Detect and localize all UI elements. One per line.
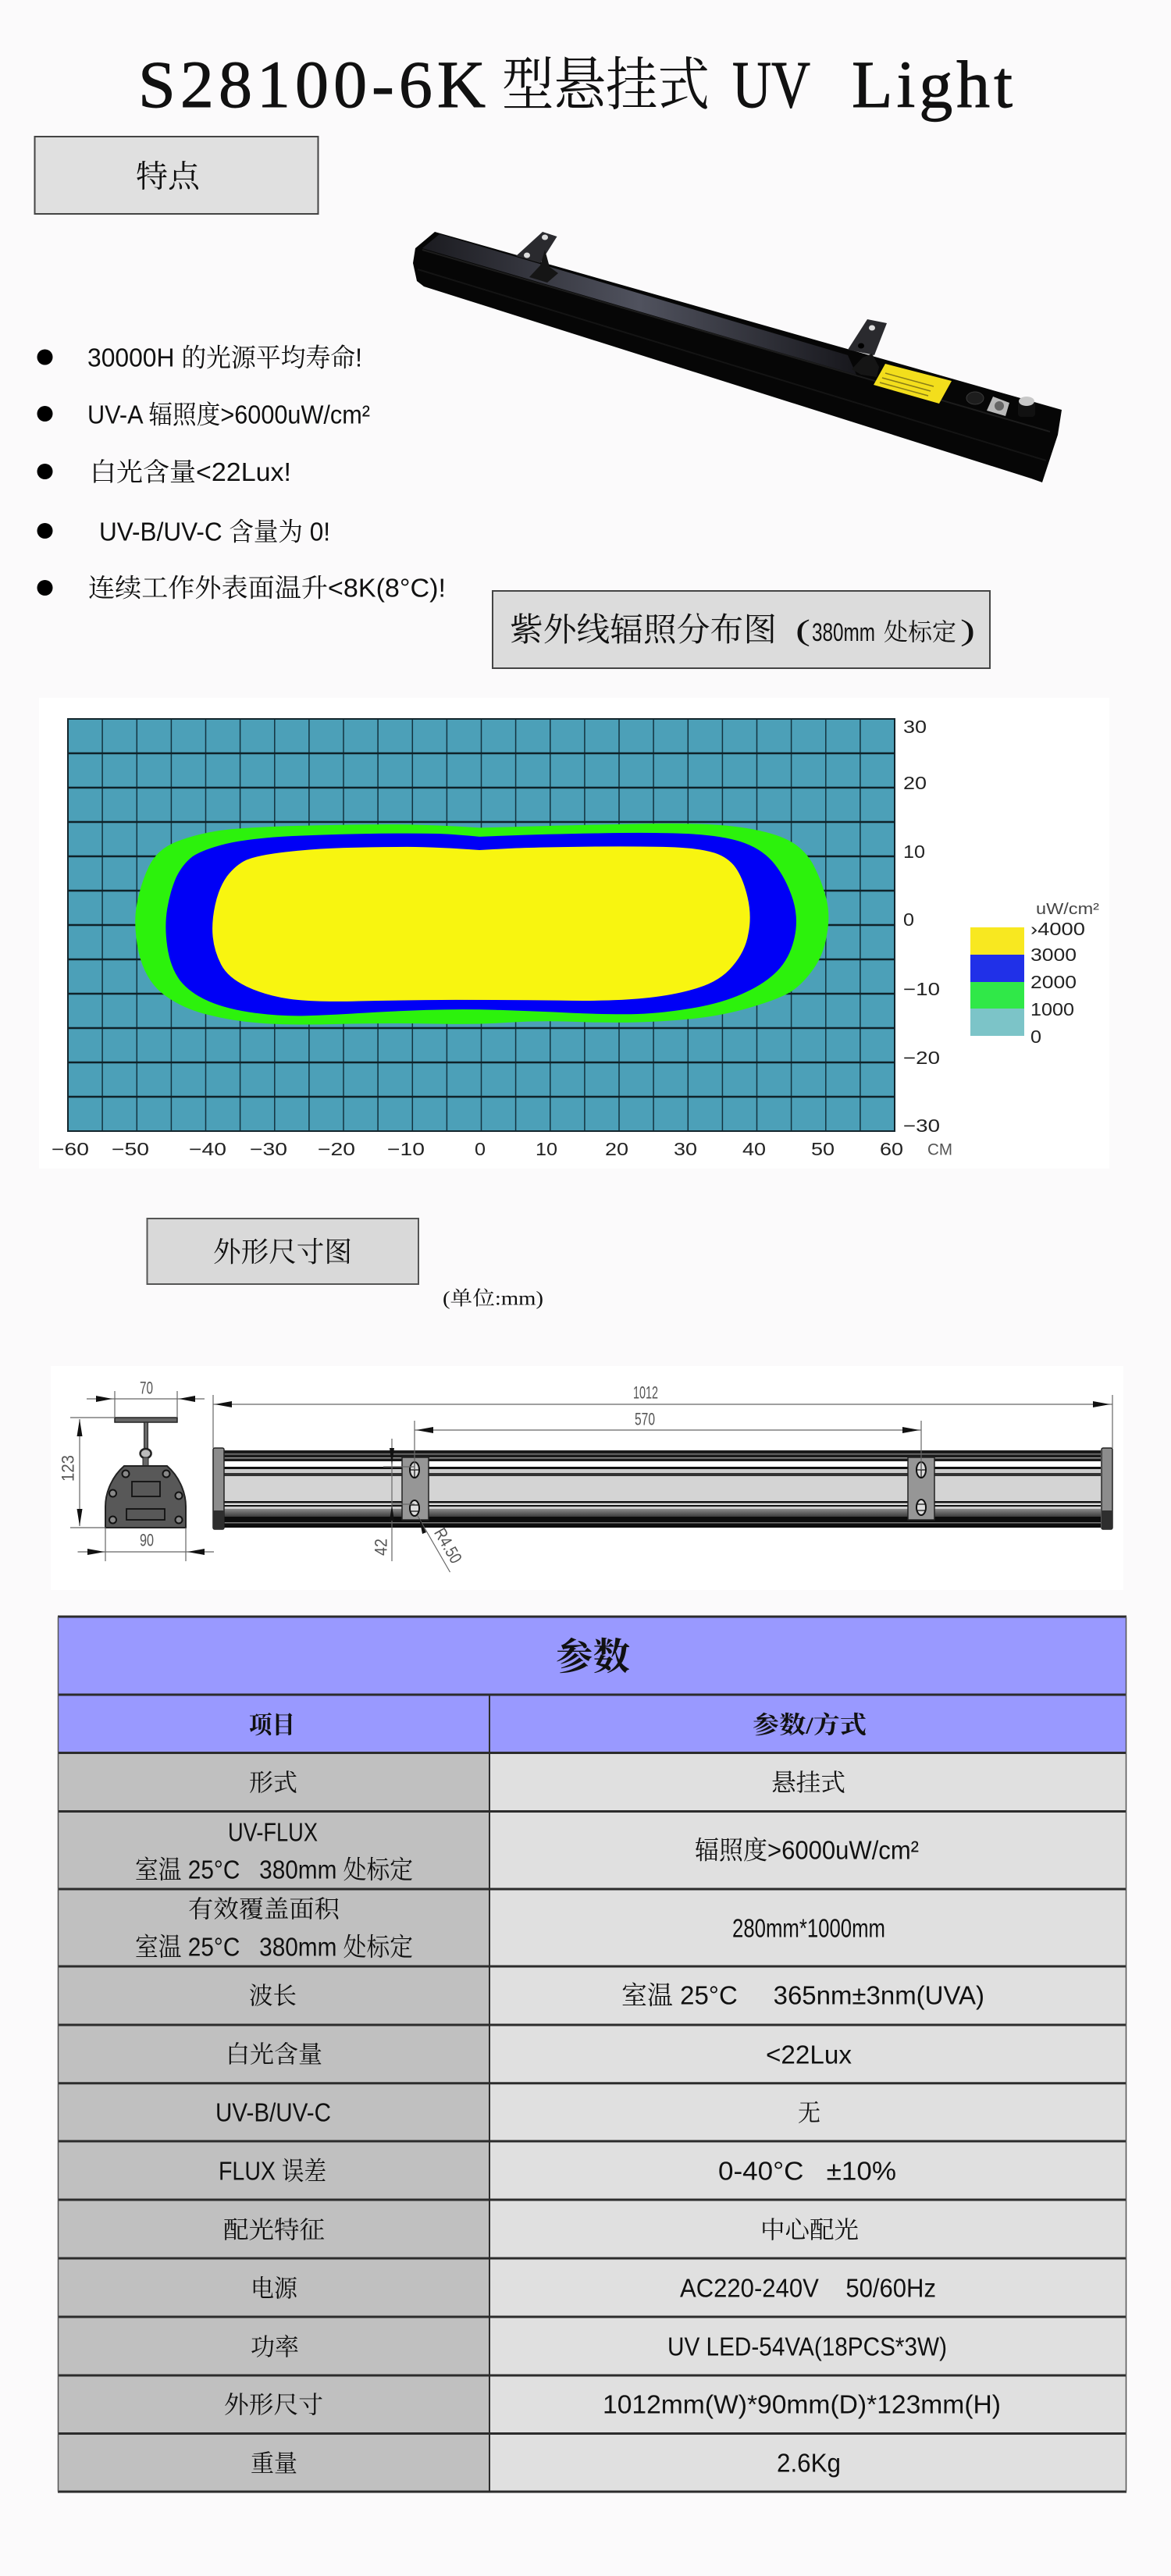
row: weight: [251, 2448, 841, 2478]
legend: 0: [1030, 1026, 1041, 1047]
row: form: 悬挂式: [771, 1769, 845, 1797]
table title: 参数: [556, 1636, 630, 1678]
unit note: (单位:mm): [443, 1288, 543, 1310]
x axis labels: 20: [605, 1139, 628, 1159]
legend: ›4000: [1030, 919, 1085, 939]
feature list: 白光含量<22Lux!: [90, 457, 291, 486]
row: effective area: [135, 1895, 885, 1961]
legend: uW/cm²: [1036, 901, 1099, 918]
x axis labels: [52, 1139, 952, 1159]
front view dimensions: [213, 1383, 1112, 1572]
row: flux error: 0-40°C ±10%: [718, 2156, 896, 2186]
heading: UV irradiance distribution: ): [960, 614, 975, 647]
row: UV-FLUX: 辐照度>6000uW/cm²: [695, 1836, 919, 1864]
column headers: 参数/方式: [753, 1711, 867, 1739]
row: UV-B/UV-C: 无: [798, 2100, 820, 2126]
front view dimensions: 1012: [633, 1383, 658, 1402]
row: UV-B/UV-C: UV-B/UV-C: [215, 2098, 331, 2126]
row: white light: [226, 2041, 852, 2069]
right bracket: [848, 319, 887, 377]
end view drawing: [105, 1418, 186, 1528]
irradiance contours: [135, 824, 828, 1024]
row: flux error: FLUX 误差: [219, 2156, 326, 2186]
end view dimensions: 70: [140, 1379, 153, 1397]
heading: UV irradiance distribution: [493, 591, 990, 668]
y axis labels: −10: [903, 979, 940, 999]
row: light distribution: 中心配光: [760, 2217, 859, 2243]
x axis labels: −40: [189, 1139, 226, 1159]
row: white light: 白光含量: [226, 2041, 322, 2069]
y axis labels: [903, 717, 940, 1136]
row: form: 形式: [249, 1769, 297, 1797]
y axis labels: 30: [903, 717, 927, 737]
heat map grid: [68, 719, 895, 1131]
row: effective area: 280mm*1000mm: [732, 1914, 885, 1942]
y axis labels: −20: [903, 1048, 940, 1068]
row: wavelength: 波长: [249, 1983, 297, 2009]
parameter table: [58, 1617, 1127, 2492]
feature list: UV-B/UV-C 含量为 0!: [99, 517, 330, 546]
front view drawing: [213, 1448, 1112, 1529]
end view dimensions: 123: [58, 1455, 78, 1482]
feature list: 30000H 的光源平均寿命!: [87, 343, 362, 372]
y axis labels: 0: [903, 909, 914, 930]
front view dimensions: R4.50: [430, 1525, 466, 1567]
feature list: [37, 343, 446, 603]
heading: UV irradiance distribution: 处标定: [884, 618, 956, 646]
x axis labels: −60: [52, 1139, 89, 1159]
row: weight: 2.6Kg: [777, 2448, 841, 2478]
x axis labels: CM: [927, 1141, 952, 1158]
x axis labels: −50: [112, 1139, 149, 1159]
x axis labels: 50: [811, 1139, 835, 1159]
row: UV-FLUX: 室温 25°C 380mm 处标定: [135, 1855, 413, 1884]
end view dimensions: [58, 1379, 214, 1561]
column headers: [249, 1711, 867, 1739]
heading: features: 特点: [136, 159, 201, 194]
product photo: black UV light bar: [413, 232, 1062, 482]
left bracket: [516, 232, 558, 283]
row: form: [249, 1769, 845, 1797]
row: white light: <22Lux: [766, 2041, 852, 2069]
heading: UV irradiance distribution: 380mm: [812, 618, 875, 646]
row: dimensions: 1012mm(W)*90mm(D)*123mm(H): [603, 2390, 1001, 2418]
row: effective area: 有效覆盖面积: [188, 1895, 340, 1923]
row: light distribution: [223, 2217, 859, 2243]
legend: 2000: [1030, 972, 1077, 992]
front view dimensions: 570: [635, 1410, 655, 1429]
column headers: 项目: [249, 1711, 295, 1739]
row: power: UV LED-54VA(18PCS*3W): [667, 2332, 947, 2361]
caution label: [874, 364, 952, 404]
row: power supply: 电源: [251, 2275, 298, 2303]
title: Light: [852, 47, 1013, 122]
connectors: [966, 392, 1035, 417]
title: UV: [732, 47, 810, 122]
title: 型悬挂式: [502, 54, 710, 118]
end view dimensions: 90: [140, 1530, 154, 1550]
heading: outline dimensions: 外形尺寸图: [213, 1236, 352, 1268]
x axis labels: 0: [475, 1139, 486, 1159]
row: light distribution: 配光特征: [223, 2217, 325, 2243]
row: wavelength: [249, 1981, 984, 2009]
heading: outline dimensions: [147, 1219, 418, 1284]
y axis labels: 20: [903, 773, 927, 793]
title: S28100-6K: [138, 47, 486, 122]
row: wavelength: 室温 25°C 365nm±3nm(UVA): [621, 1981, 984, 2009]
row: power: 功率: [251, 2334, 299, 2361]
row: power: [251, 2332, 947, 2361]
x axis labels: 60: [880, 1139, 903, 1159]
table rules: [58, 1617, 1127, 2492]
row: effective area: 室温 25°C 380mm 处标定: [135, 1933, 413, 1961]
row: power supply: [251, 2273, 936, 2303]
x axis labels: −10: [387, 1139, 425, 1159]
row: dimensions: 外形尺寸: [224, 2392, 323, 2418]
y axis labels: −30: [903, 1115, 940, 1136]
table backgrounds: [58, 1617, 1127, 2492]
x axis labels: 10: [536, 1139, 557, 1159]
heading: features: [34, 137, 319, 214]
title: [138, 47, 1013, 122]
legend: 1000: [1030, 999, 1074, 1019]
row: weight: 重量: [251, 2450, 297, 2478]
chart panel: irradiance map: [39, 698, 1109, 1169]
front view dimensions: 42: [372, 1539, 390, 1556]
heading: UV irradiance distribution: (: [795, 614, 810, 647]
feature list: 连续工作外表面温升<8K(8°C)!: [88, 573, 446, 603]
row: flux error: [219, 2156, 896, 2186]
x axis labels: −30: [250, 1139, 287, 1159]
heading: UV irradiance distribution: 紫外线辐照分布图: [510, 613, 777, 649]
mounting bracket left: [402, 1457, 429, 1520]
row: UV-FLUX: UV-FLUX: [228, 1817, 318, 1847]
dimension drawing panel: [51, 1366, 1123, 1590]
x axis labels: 40: [742, 1139, 766, 1159]
y axis labels: 10: [903, 841, 925, 862]
row: dimensions: [224, 2390, 1001, 2418]
x axis labels: 30: [674, 1139, 697, 1159]
mounting bracket right: [908, 1457, 934, 1520]
row: UV-B/UV-C: [215, 2098, 820, 2126]
legend: [970, 901, 1099, 1047]
row: UV-FLUX: [135, 1817, 919, 1884]
feature list: UV-A 辐照度>6000uW/cm²: [87, 400, 370, 429]
x axis labels: −20: [318, 1139, 355, 1159]
row: power supply: AC220-240V 50/60Hz: [680, 2273, 936, 2303]
legend: 3000: [1030, 945, 1077, 965]
